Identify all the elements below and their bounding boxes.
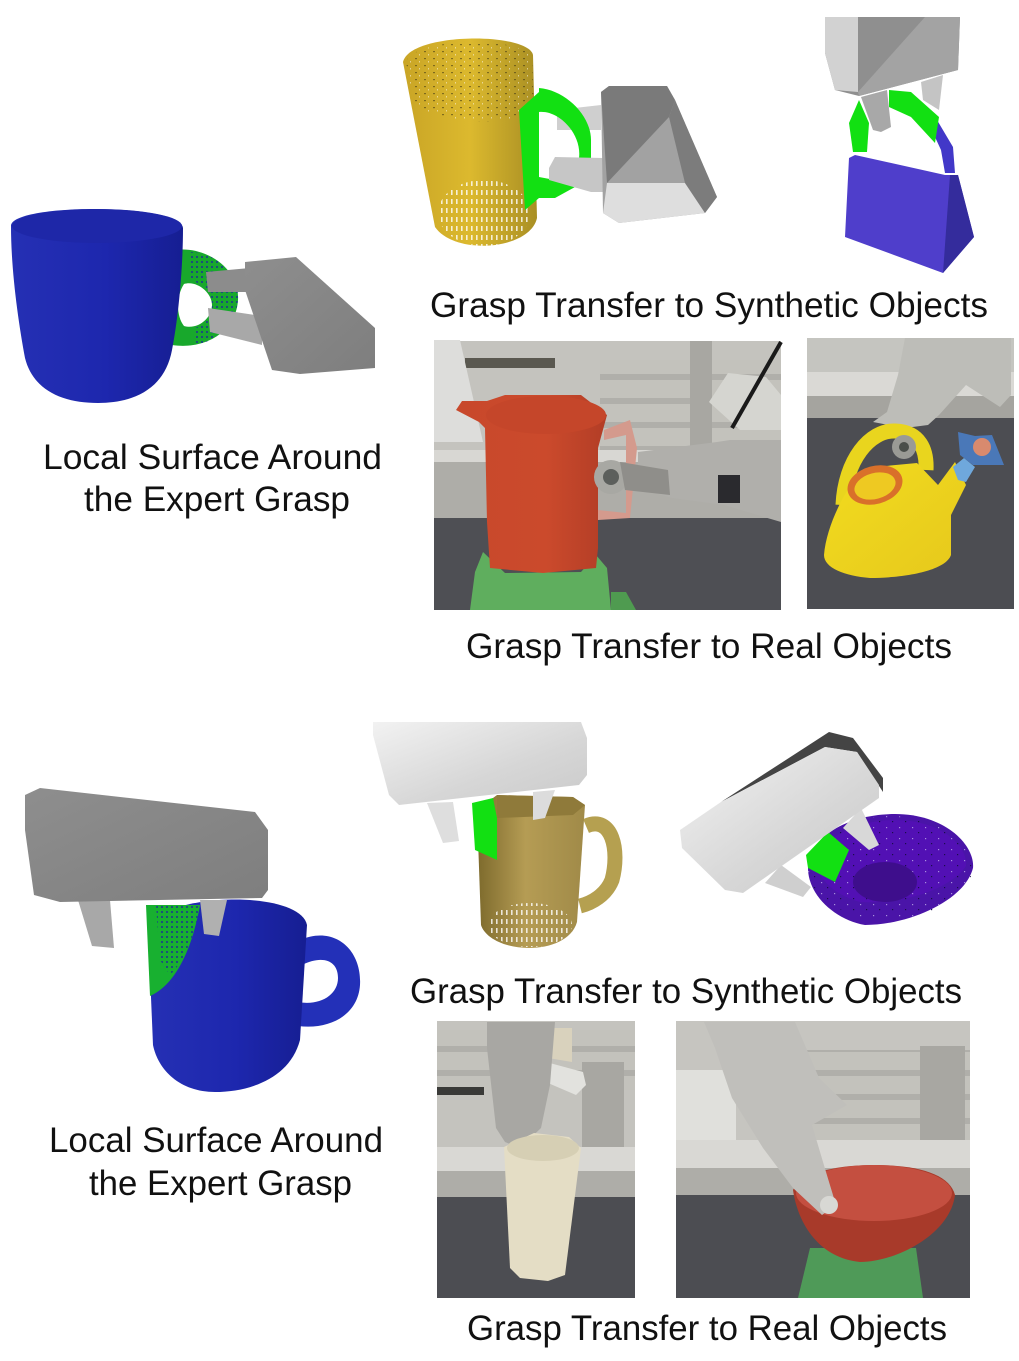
- mug body: [477, 795, 585, 948]
- frame post: [582, 1062, 624, 1147]
- bottom-left caption: Local Surface Around: [49, 1121, 383, 1160]
- pitcher opening: [486, 396, 606, 434]
- palm lower facets: [603, 183, 705, 223]
- see-through base: [438, 180, 530, 246]
- wrist: [892, 435, 916, 459]
- bowl: [793, 1165, 955, 1262]
- synthetic: purple bowl with gripper: [680, 732, 973, 925]
- palm light facet: [825, 17, 858, 92]
- gripper front finger: [200, 900, 227, 936]
- bowl inner: [815, 820, 966, 902]
- can body: [824, 462, 966, 578]
- gripper palm: [825, 17, 960, 96]
- gripper palm: [601, 86, 717, 223]
- back finger: [427, 802, 459, 843]
- cylinder: [403, 39, 537, 246]
- robot arm: [487, 1022, 555, 1148]
- synthetic: yellow cylinder with gripper: [403, 39, 717, 246]
- vertical posts: [690, 341, 712, 451]
- bag side: [943, 175, 974, 273]
- mug handle: [298, 936, 360, 1027]
- robot wrap: [548, 1028, 572, 1062]
- green handle: [519, 88, 591, 210]
- mug interior: [497, 795, 585, 818]
- mug opening: [12, 209, 182, 243]
- gripper back finger: [78, 900, 114, 948]
- pitcher: [456, 395, 607, 573]
- top-left caption: Local Surface Around: [43, 438, 382, 477]
- lower finger: [765, 865, 811, 897]
- robot arm: [638, 440, 781, 522]
- right finger: [843, 808, 879, 850]
- green stand: [470, 552, 611, 610]
- green handle left: [849, 100, 869, 152]
- photo: yellow watering can: [807, 338, 1014, 609]
- robot unit: [709, 373, 781, 430]
- robot unit: [546, 1062, 586, 1095]
- palm top facet: [601, 86, 675, 183]
- photo: red bowl: [676, 1021, 970, 1298]
- inner finger: [533, 790, 555, 820]
- top-left caption: [43, 438, 382, 519]
- gripper palm: [25, 788, 268, 902]
- bottom-left mug: local surface around expert grasp: [25, 788, 360, 1092]
- right finger: [921, 75, 943, 110]
- top-left caption: the Expert Grasp: [84, 480, 350, 519]
- bottom-left caption: [49, 1121, 383, 1203]
- can handle: [843, 431, 926, 505]
- gripper palm: [373, 722, 587, 805]
- pitcher handle: [598, 420, 637, 520]
- gripper palm: [680, 747, 879, 893]
- heading: synthetic top: Grasp Transfer to Synthetic Objects: [430, 286, 988, 325]
- see-through base: [488, 903, 572, 947]
- gripper palm: [245, 257, 375, 374]
- top-left mug: local surface around expert grasp: [11, 209, 375, 403]
- green handle right: [889, 90, 939, 143]
- bowl centre: [853, 862, 917, 902]
- photo: paper cup: [437, 1021, 635, 1298]
- robot arm: [873, 338, 1011, 428]
- caption: real bottom: Grasp Transfer to Real Objects: [467, 1309, 947, 1348]
- purple handle: [935, 120, 955, 173]
- cable box: [465, 358, 555, 368]
- synthetic: gold mug with gripper: [373, 722, 615, 948]
- spout neck: [953, 458, 975, 482]
- table: [434, 518, 781, 610]
- cylinder speckle: [406, 42, 534, 121]
- speckles on green surface: [156, 905, 200, 975]
- cable box: [437, 1087, 484, 1095]
- bowl outer: [808, 814, 973, 925]
- gripper dark edge: [721, 732, 883, 802]
- bowl interior: [796, 1165, 952, 1221]
- mug handle with green surface: [172, 250, 238, 346]
- palm lower facet: [858, 17, 960, 96]
- bowl speckle: [808, 816, 972, 920]
- cup opening: [507, 1135, 579, 1161]
- spout flower: [958, 432, 1004, 465]
- can opening: [843, 459, 907, 511]
- photo: red pitcher: [434, 340, 781, 610]
- mug body: [148, 899, 307, 1092]
- stand tab: [611, 592, 636, 610]
- green patch: [472, 798, 497, 860]
- white post: [434, 340, 483, 442]
- table rail: [434, 450, 781, 518]
- bottom-left caption: the Expert Grasp: [89, 1164, 352, 1203]
- palm shadow edge: [669, 100, 717, 213]
- caption: real top: Grasp Transfer to Real Objects: [466, 627, 952, 666]
- white panel: [676, 1070, 736, 1140]
- heading: synthetic bottom: Grasp Transfer to Synthetic Objects: [410, 972, 962, 1011]
- gripper back finger: [557, 105, 601, 130]
- cable: [732, 342, 781, 428]
- finger: [861, 90, 891, 132]
- green stand: [798, 1248, 923, 1298]
- gripper front finger: [549, 157, 603, 192]
- bag body: [845, 155, 974, 273]
- green surface: [146, 905, 200, 996]
- green patch: [806, 832, 849, 882]
- cup: [504, 1133, 581, 1281]
- mug body: [11, 209, 183, 403]
- mug handle: [580, 824, 615, 906]
- gripper wrist: [594, 460, 628, 494]
- frame posts: [920, 1046, 965, 1140]
- fingertip: [820, 1196, 838, 1214]
- gripper fingers: [208, 308, 262, 345]
- synthetic: purple bag with gripper: [825, 17, 974, 273]
- robot arm: [704, 1022, 847, 1215]
- horizontal rails: [600, 360, 781, 450]
- speckled handle surface: [190, 252, 238, 345]
